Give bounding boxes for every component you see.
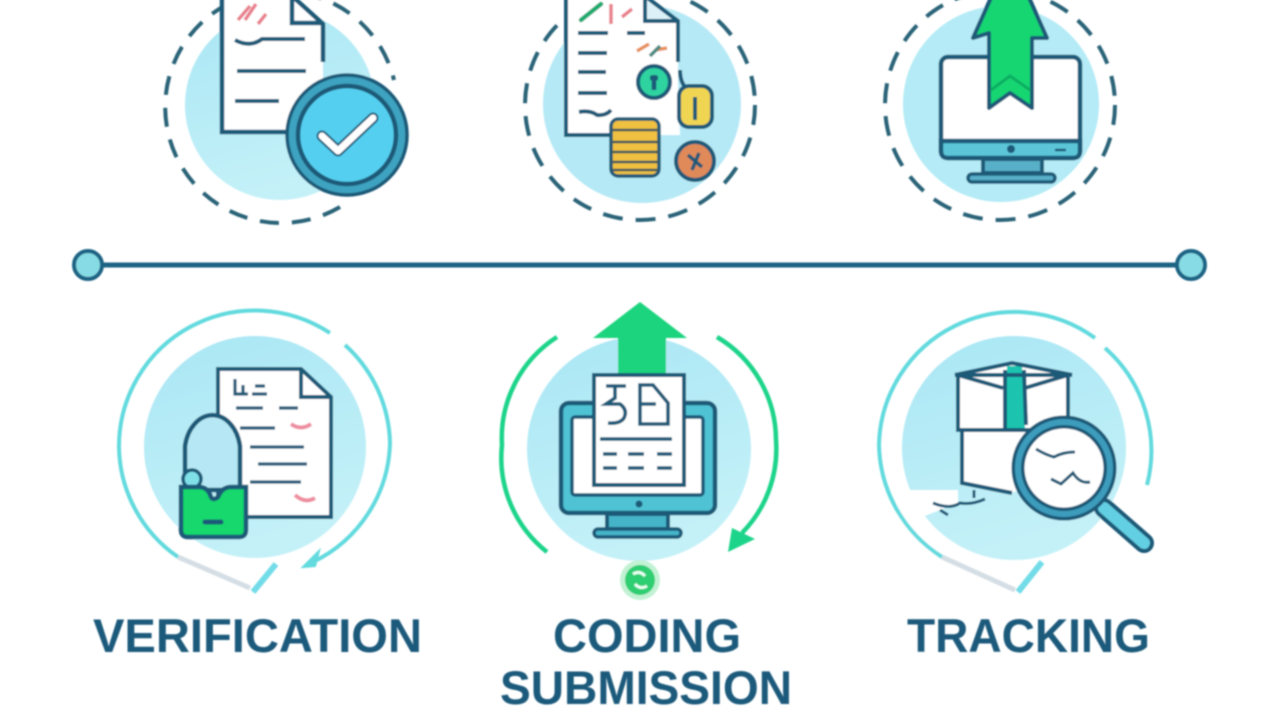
icon: yellow token bbox=[679, 86, 712, 127]
timeline node right bbox=[1177, 251, 1205, 279]
panel: top left document check bbox=[165, 0, 407, 223]
timeline node left bbox=[74, 251, 102, 279]
icon: document bbox=[594, 375, 684, 485]
panel: top centre document and coins bbox=[525, 0, 755, 220]
icon: monitor bbox=[561, 403, 715, 537]
label: coding: CODING bbox=[553, 609, 741, 662]
icon: circular arrow ring bbox=[119, 310, 390, 592]
timeline bbox=[74, 251, 1205, 279]
icon: document bbox=[222, 0, 323, 132]
icon: dashed ring bbox=[885, 0, 1115, 220]
icon: document bbox=[218, 369, 331, 517]
icon: padlock bbox=[181, 415, 246, 537]
icon: white wash lower left bbox=[895, 490, 958, 560]
icon: magnifying glass bbox=[1018, 422, 1144, 543]
icon: parcel box bbox=[933, 363, 1072, 515]
icon: ring bbox=[879, 312, 1151, 592]
icon: green up arrow bbox=[593, 302, 687, 378]
icon: pale blue disc bbox=[527, 337, 751, 561]
icon: pale blue disc bbox=[185, 10, 375, 200]
icon: pale blue disc bbox=[902, 336, 1126, 560]
icon: green circular arrows bbox=[501, 337, 776, 552]
icon: coin stack bbox=[611, 119, 659, 176]
icon: pale blue disc bbox=[543, 5, 741, 203]
icon: dashed ring bbox=[525, 0, 755, 220]
icon: green up arrow bbox=[973, 0, 1047, 108]
icon: orange cross token bbox=[676, 142, 714, 180]
label: submission: SUBMISSION bbox=[500, 661, 792, 714]
icon: green sync badge bbox=[620, 560, 660, 600]
icon: check badge bbox=[287, 75, 407, 195]
label: verification: VERIFICATION bbox=[93, 609, 422, 662]
label: tracking: TRACKING bbox=[907, 609, 1150, 662]
panel: top right upload to monitor bbox=[885, 0, 1115, 220]
panel: verification bbox=[93, 310, 422, 662]
icon: document bbox=[566, 0, 686, 135]
panel: coding submission bbox=[500, 302, 792, 714]
icon: dashed ring bbox=[165, 0, 394, 223]
icon: pale blue disc bbox=[903, 6, 1099, 202]
icon: pale blue disc bbox=[144, 336, 366, 558]
panel: tracking bbox=[879, 312, 1151, 662]
icon: monitor bbox=[941, 57, 1080, 182]
icon: green token bbox=[638, 66, 670, 98]
